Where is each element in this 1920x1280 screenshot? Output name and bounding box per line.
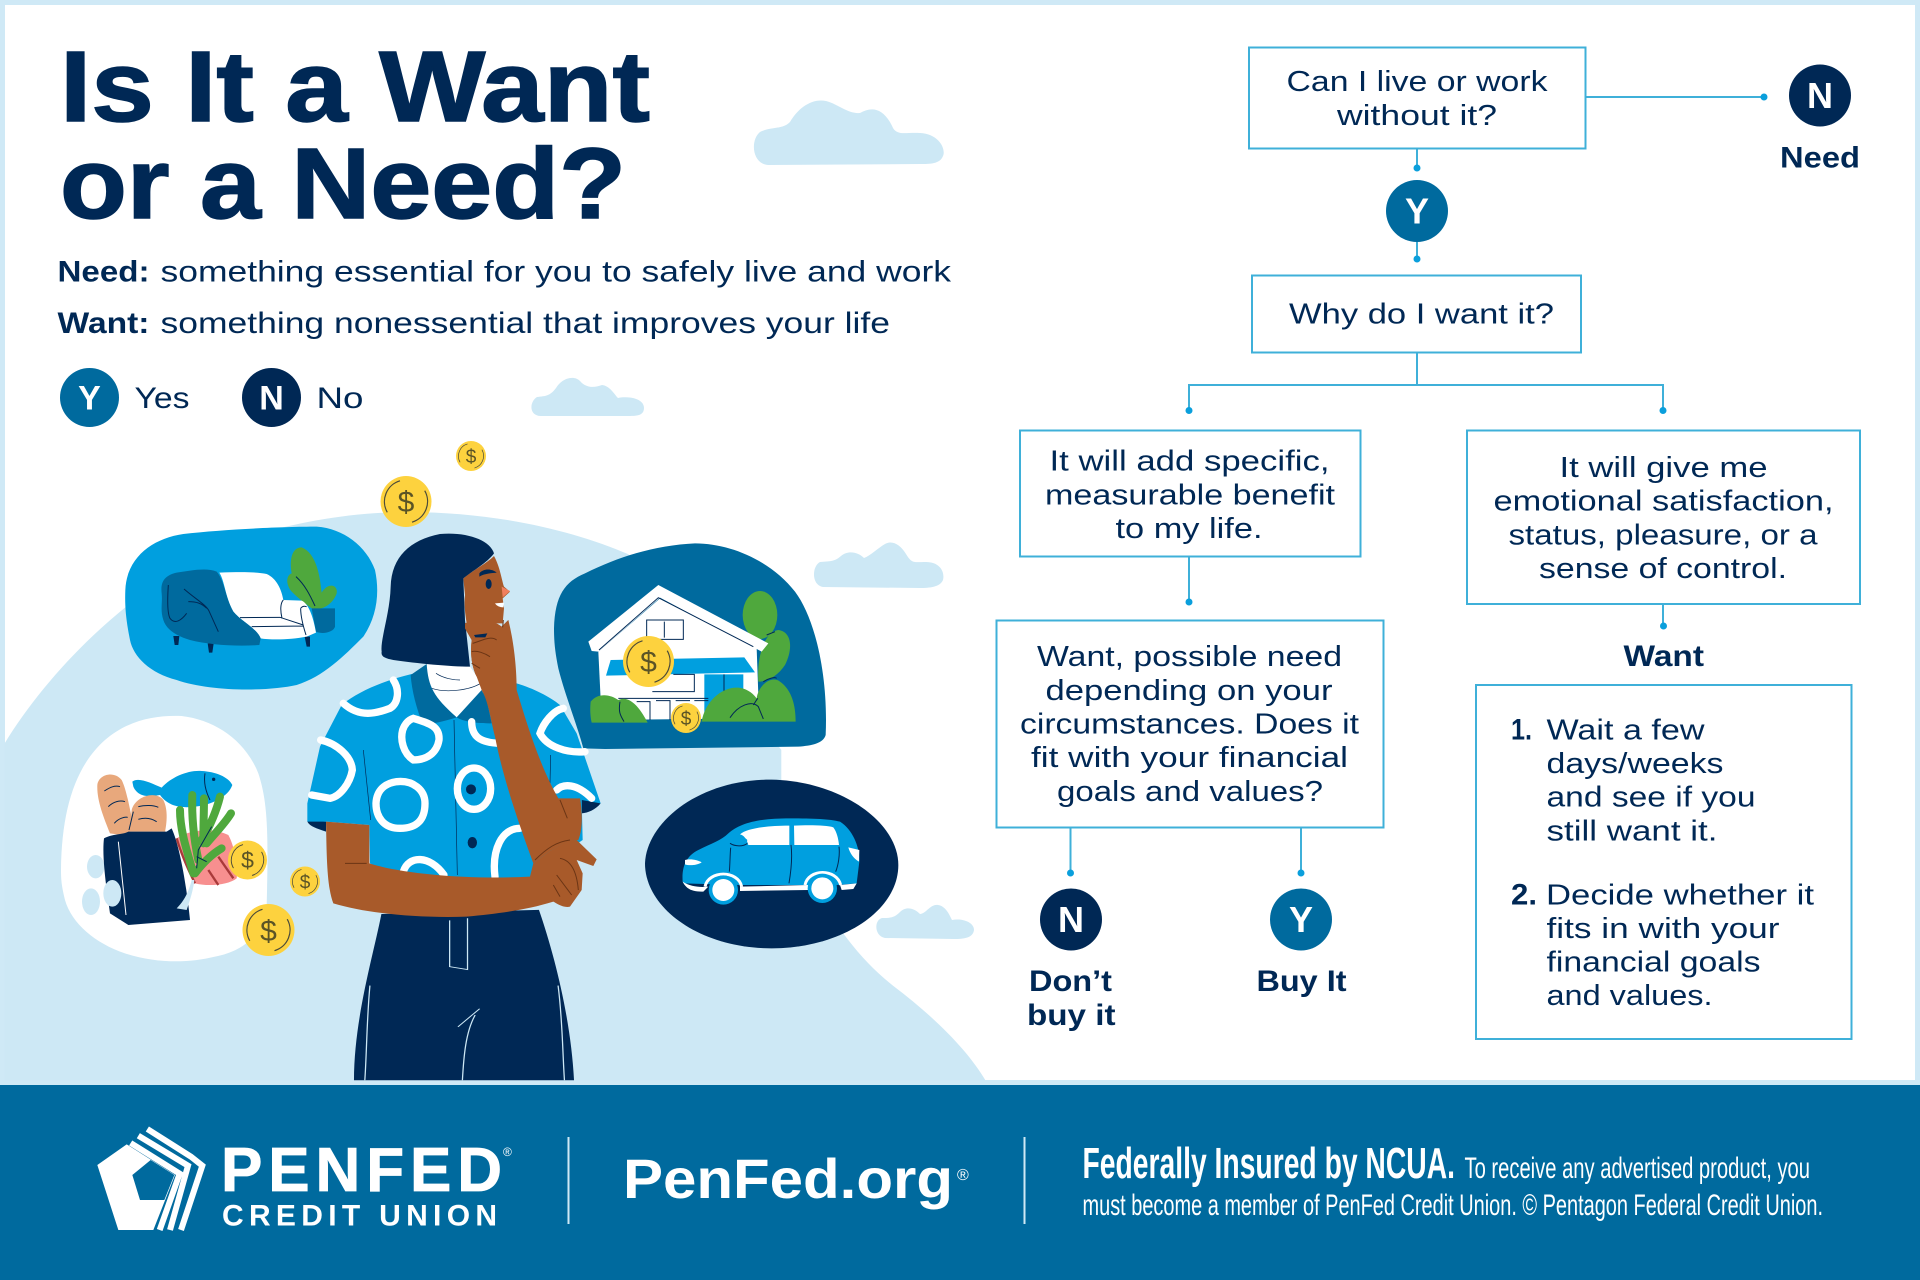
- box: want, possible need: depending on your: [1046, 675, 1333, 707]
- raised arm: [465, 620, 582, 863]
- definitions text block: something essential for you to safely live and work: [160, 256, 952, 288]
- coin: $: [300, 872, 311, 894]
- forearm resting: [326, 822, 597, 917]
- thought bubble: sofa: [125, 527, 377, 690]
- box: can I live or work: without it?: [1336, 100, 1497, 132]
- result: don't buy it: N: [1058, 899, 1084, 940]
- logo wordmark: ®: [503, 1145, 512, 1159]
- definitions text block: Need:: [58, 256, 150, 288]
- box: measurable benefit: [1020, 430, 1360, 556]
- box: measurable benefit: to my life.: [1116, 513, 1262, 545]
- title: [60, 31, 650, 240]
- result: need: [1780, 64, 1860, 174]
- coin: $: [398, 486, 415, 519]
- coin: [290, 866, 320, 896]
- box: emotional satisfaction: [1467, 430, 1860, 604]
- box: measurable benefit: It will add specific,: [1050, 446, 1330, 478]
- box: emotional satisfaction: status, pleasure, or a: [1508, 520, 1818, 552]
- result: don't buy it: Don’t: [1029, 965, 1112, 998]
- result: want: Want: [1624, 640, 1704, 673]
- torso, head and arms: [307, 534, 601, 917]
- box: want next steps list: [1476, 685, 1852, 1039]
- box: emotional satisfaction: sense of control.: [1539, 553, 1787, 585]
- result: don't buy it: buy it: [1027, 999, 1116, 1032]
- flowchart: [996, 48, 1860, 1039]
- box: emotional satisfaction: It will give me: [1560, 452, 1768, 484]
- box: why do I want it: Why do I want it?: [1289, 298, 1554, 330]
- coin: [456, 441, 486, 471]
- coin: $: [466, 447, 477, 468]
- thought bubble: groceries: [61, 716, 267, 961]
- woman figure: [307, 534, 601, 1080]
- title: or a Need?: [60, 128, 626, 240]
- connector lines: [1067, 94, 1768, 876]
- coin: $: [640, 646, 657, 679]
- badge: yes: Y: [1405, 190, 1429, 232]
- coin: [380, 476, 432, 527]
- coin: [623, 636, 674, 687]
- box: want, possible need: goals and values?: [1057, 776, 1323, 808]
- disclosure text: [1082, 1139, 1823, 1222]
- coin: [228, 840, 267, 880]
- result: buy it: [1256, 888, 1347, 998]
- logo wordmark: [221, 1136, 512, 1232]
- definitions text block: [58, 256, 952, 340]
- thought bubble: car: [645, 780, 898, 948]
- clouds: [531, 100, 974, 939]
- box: why do I want it: [1252, 276, 1581, 352]
- coin: [242, 904, 294, 956]
- title: Is It a Want: [60, 31, 650, 143]
- logo mark: pentagon: [97, 1129, 202, 1230]
- box: want, possible need: fit with your financial: [1031, 742, 1348, 774]
- box: measurable benefit: measurable benefit: [1045, 480, 1335, 512]
- shirt pattern rings: [312, 680, 592, 877]
- legend: yes and no: No: [316, 382, 364, 415]
- coin: [671, 703, 701, 733]
- box: want next steps list: days/weeks: [1546, 748, 1724, 780]
- coin: $: [241, 847, 254, 873]
- coin: $: [681, 709, 692, 730]
- legend: yes and no: Yes: [134, 382, 190, 415]
- box: want next steps list: Decide whether it: [1546, 880, 1814, 912]
- box: want, possible need: circumstances. Does it: [1020, 708, 1359, 740]
- result: need: Need: [1780, 142, 1860, 174]
- box: want next steps list: 1.: [1511, 714, 1532, 746]
- background hill: [4, 512, 985, 1080]
- hair: [381, 534, 494, 667]
- result: buy it: Buy It: [1256, 965, 1347, 998]
- badge: yes: [1386, 180, 1448, 242]
- result: need: N: [1807, 75, 1833, 116]
- box: can I live or work: Can I live or work: [1286, 66, 1548, 98]
- website: PenFed.org: [623, 1147, 953, 1210]
- logo wordmark: PENFED: [221, 1136, 502, 1205]
- box: want next steps list: financial goals: [1546, 946, 1760, 978]
- legend: yes and no: Y: [78, 380, 101, 418]
- result: don't buy it: [1027, 888, 1116, 1032]
- result: buy it: Y: [1289, 899, 1313, 940]
- legend: yes and no: [60, 368, 364, 427]
- box: want next steps list: 2.: [1511, 878, 1537, 912]
- box: want, possible need: [996, 620, 1384, 828]
- logo wordmark: CREDIT UNION: [222, 1200, 497, 1232]
- box: want next steps list: and values.: [1546, 980, 1712, 1012]
- dollar coins: [228, 441, 701, 956]
- illustration: [4, 441, 985, 1080]
- box: can I live or work: [1249, 48, 1586, 148]
- disclosure text: Federally Insured by NCUA.: [1082, 1139, 1455, 1188]
- box: want next steps list: and see if you: [1546, 782, 1756, 814]
- thought bubble: house: [554, 543, 826, 749]
- footer band: [0, 1085, 1920, 1280]
- trousers: [354, 910, 574, 1080]
- definitions text block: Want:: [58, 307, 150, 340]
- box: want next steps list: fits in with your: [1546, 913, 1780, 945]
- box: want next steps list: Wait a few: [1546, 714, 1706, 746]
- website: ®: [957, 1167, 969, 1184]
- face: [463, 556, 510, 623]
- box: want next steps list: still want it.: [1546, 816, 1718, 848]
- box: want, possible need: Want, possible need: [1037, 641, 1342, 673]
- definitions text block: something nonessential that improves your life: [160, 307, 890, 340]
- box: emotional satisfaction: emotional satisfaction,: [1494, 486, 1834, 518]
- coin: $: [260, 915, 277, 948]
- legend: yes and no: N: [259, 380, 284, 418]
